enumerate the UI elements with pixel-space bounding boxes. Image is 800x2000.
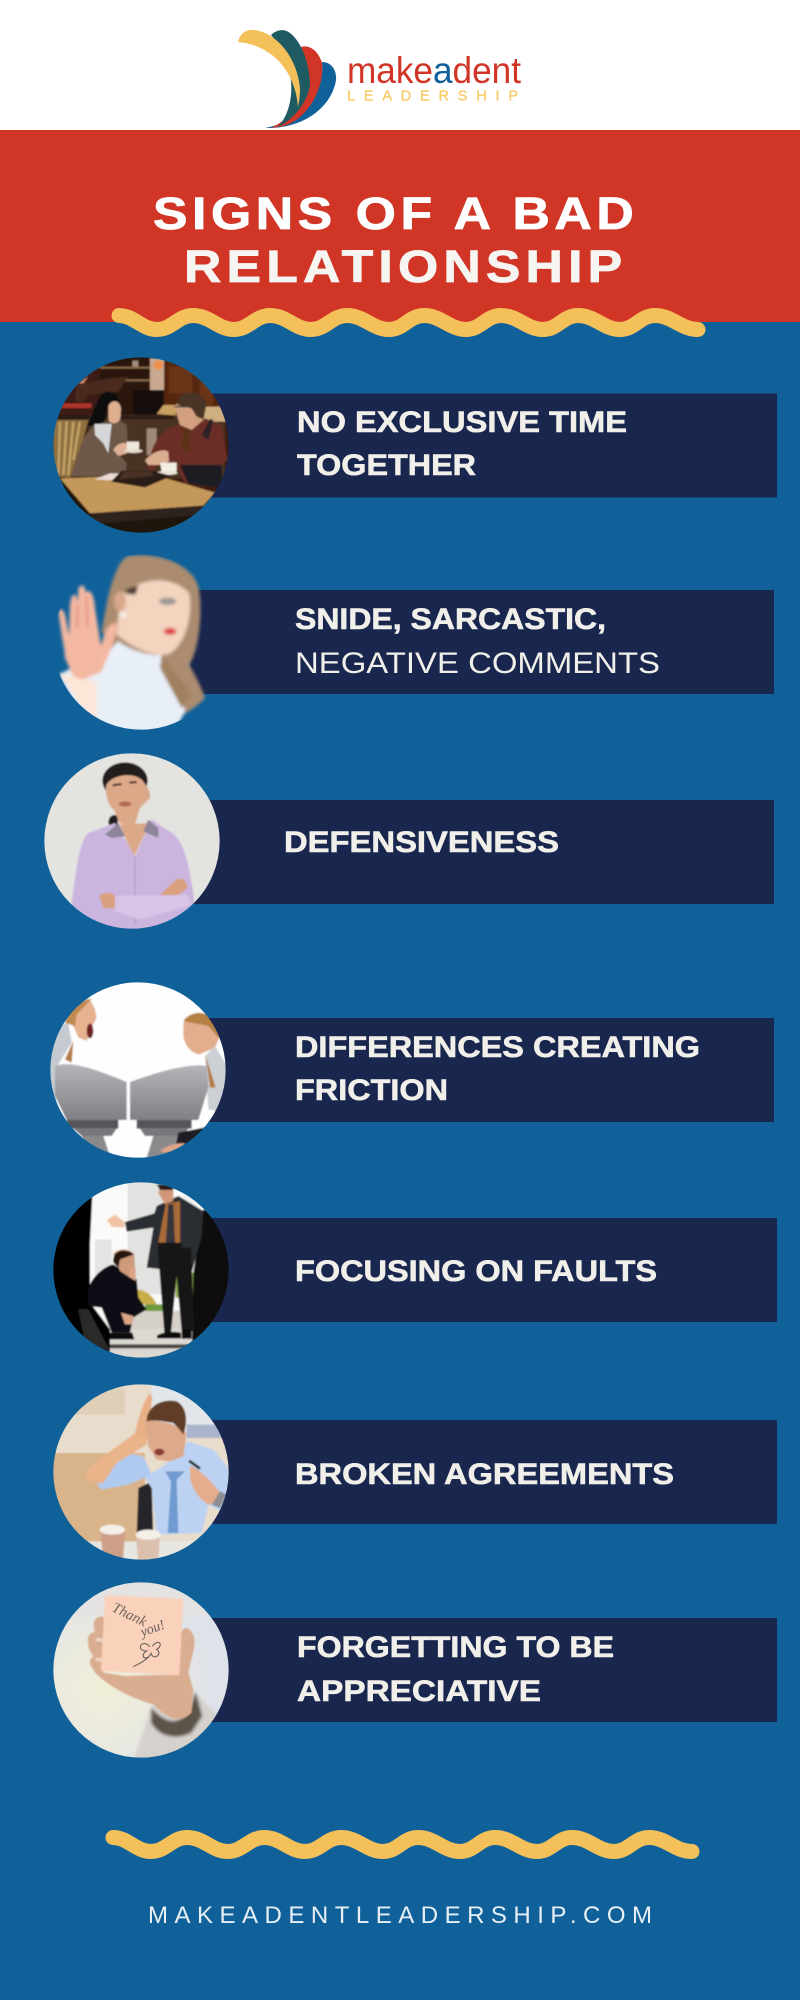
label line 2: TOGETHER [297, 449, 476, 482]
photo: hand holding a thank-you note [53, 1582, 229, 1758]
bar [150, 800, 774, 904]
photo: two women shouting over monitors [50, 982, 226, 1158]
photo: woman with crossed arms looking up [44, 753, 220, 929]
label: FOCUSING ON FAULTS [295, 1255, 657, 1288]
panel: snide, sarcastic, negative comments [58, 555, 774, 738]
photo: man scolding a crouching colleague [53, 1182, 229, 1358]
logo subtitle: LEADERSHIP [347, 88, 518, 104]
label line 1: FORGETTING TO BE [297, 1631, 614, 1664]
logo wordmark: makeadent [347, 50, 522, 91]
wavy divider bottom [113, 1838, 692, 1852]
header background [0, 0, 800, 130]
footer url: MAKEADENTLEADERSHIP.COM [148, 1902, 652, 1929]
label line 2: NEGATIVE COMMENTS [295, 647, 660, 680]
bar [190, 590, 774, 694]
panel: focusing on faults [45, 1176, 777, 1366]
photo: woman holding up her hand [58, 555, 205, 738]
photo: stressed man with hand on forehead [53, 1384, 229, 1560]
panel: defensiveness [40, 748, 774, 938]
title banner [0, 130, 800, 322]
note handwriting second word: you! [137, 1618, 167, 1641]
bar [150, 1618, 777, 1722]
bar [150, 1218, 777, 1322]
label line 1: NO EXCLUSIVE TIME [297, 406, 627, 439]
label line 1: DIFFERENCES CREATING [295, 1031, 700, 1064]
panel: broken agreements [45, 1378, 777, 1568]
label line 1: SNIDE, SARCASTIC, [295, 603, 606, 636]
panel: forgetting to be appreciative [45, 1576, 777, 1766]
label line 2: FRICTION [295, 1074, 448, 1107]
title line 1: SIGNS OF A BAD [153, 189, 634, 239]
logo [238, 30, 522, 128]
note handwriting: Thank [109, 1600, 150, 1631]
label: BROKEN AGREEMENTS [295, 1458, 674, 1491]
bar [150, 1420, 777, 1524]
bar [150, 394, 777, 498]
title line 2: RELATIONSHIP [184, 242, 622, 292]
label: DEFENSIVENESS [284, 826, 559, 859]
wavy divider top [119, 316, 698, 330]
label line 2: APPRECIATIVE [297, 1675, 541, 1708]
panel: differences creating friction [45, 976, 774, 1166]
bar [150, 1018, 774, 1122]
photo: couple talking at a table [53, 357, 229, 533]
panel: no exclusive time together [45, 350, 777, 540]
icon: feather fan [238, 30, 336, 128]
